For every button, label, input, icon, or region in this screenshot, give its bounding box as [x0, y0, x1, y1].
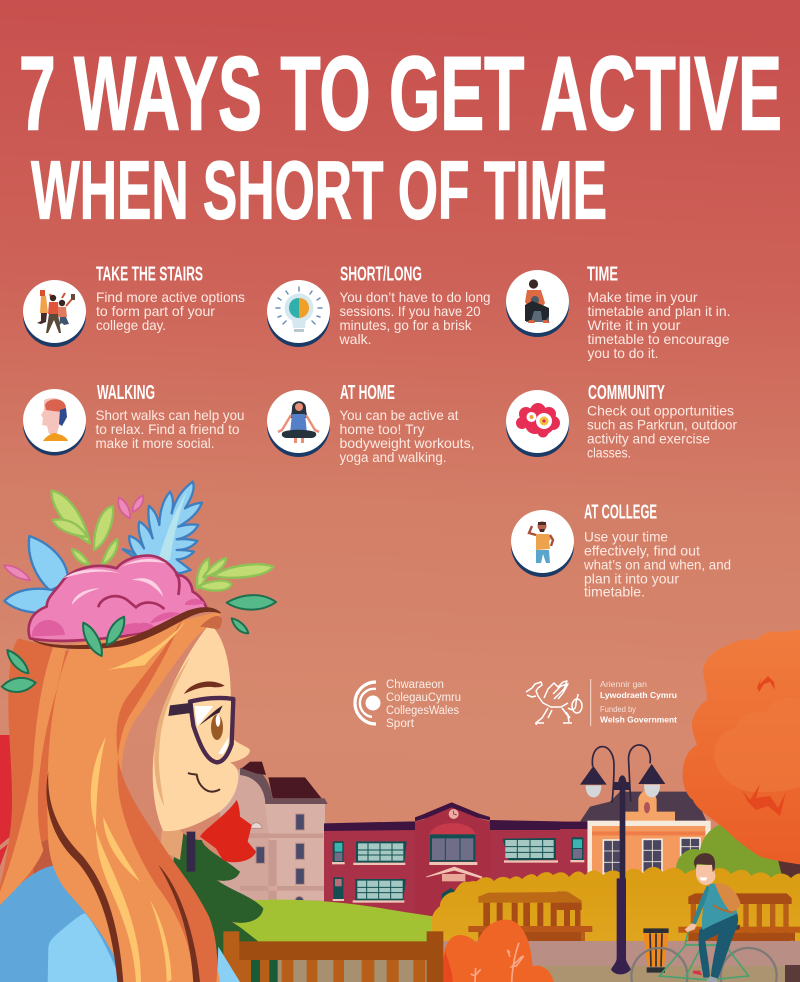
logo: Colleges Wales Sport [355, 679, 461, 730]
heading: AT COLLEGE [584, 500, 657, 524]
body text: make it more social. [96, 436, 214, 451]
funding text: Welsh Government [600, 714, 677, 724]
body text [583, 530, 731, 600]
funding text: Funded by [600, 705, 636, 714]
logo: Colleges Wales Sport: Sport [386, 718, 415, 730]
grass [233, 900, 466, 952]
icon: seated man [506, 270, 569, 337]
red and green foliage behind girl [165, 800, 279, 982]
logo: Colleges Wales Sport: Chwaraeon [386, 679, 444, 691]
legs [699, 911, 738, 979]
body text: timetable and plan it in. [588, 304, 730, 319]
body text: to form part of your [96, 304, 215, 319]
logo: Colleges Wales Sport: CollegesWales [386, 705, 459, 717]
body text: bodyweight workouts, [340, 436, 474, 451]
body text: Write it in your [588, 318, 681, 333]
body text: You can be active at [340, 408, 459, 423]
beige building [210, 762, 328, 903]
blue leaves [4, 536, 68, 613]
body text: effectively, find out [584, 544, 700, 558]
body text: walk. [338, 332, 372, 347]
benches [557, 892, 800, 970]
teal leaves [2, 595, 276, 692]
head [696, 865, 715, 885]
front hair [0, 612, 222, 982]
icon: cloud with cogs [506, 390, 569, 457]
body text: what’s on and when, and [583, 558, 731, 572]
body text [96, 290, 245, 333]
foreground orange bush [442, 920, 554, 982]
body text: Make time in your [588, 290, 698, 305]
body text: sessions. If you have 20 [340, 304, 481, 319]
torso and arm [702, 884, 737, 930]
body text: home too! Try [340, 422, 425, 437]
funding text [600, 680, 677, 724]
brain cut line [31, 607, 221, 649]
foreground bench [223, 931, 443, 982]
body text: Use your time [584, 530, 668, 544]
item: time [506, 262, 730, 361]
heading: TIME [587, 262, 618, 286]
logo: Welsh Government [526, 679, 677, 726]
red tree at left edge [0, 735, 12, 866]
scene: college, park and cyclist [0, 629, 800, 982]
body text [340, 408, 474, 465]
item: short/long [267, 262, 490, 347]
icon: yoga woman [267, 390, 330, 457]
green sprigs [52, 491, 273, 591]
glasses [168, 698, 233, 762]
item: take the stairs [23, 262, 245, 347]
neck [160, 813, 183, 860]
body text: such as Parkrun, outdoor [587, 418, 737, 432]
body text: timetable. [584, 584, 645, 600]
street lamp [580, 745, 665, 974]
pavement and ground [440, 941, 800, 982]
body text: you to do it. [588, 346, 658, 361]
eyebrow [184, 682, 225, 694]
icon: flexing man [511, 510, 574, 577]
neck shadow [33, 837, 87, 887]
icon: head with brain [23, 389, 86, 456]
icon: Welsh dragon [526, 681, 582, 725]
orange building [560, 790, 711, 898]
title [19, 36, 782, 236]
cyclist [631, 853, 777, 982]
back green bush [676, 822, 800, 900]
item: community [506, 381, 737, 460]
heading: SHORT/LONG [340, 262, 422, 286]
icon: light bulb [267, 280, 330, 347]
face [153, 623, 250, 831]
body text: timetable to encourage [588, 332, 730, 347]
divider line [590, 679, 592, 726]
heading: AT HOME [340, 381, 395, 404]
body text: minutes, go for a brisk [340, 318, 472, 333]
body text: college day. [96, 318, 166, 333]
pink leaves [4, 496, 143, 580]
shoulder blue [0, 865, 130, 982]
body text: to relax. Find a friend to [96, 422, 240, 437]
heading: TAKE THE STAIRS [96, 262, 203, 286]
plants [4, 482, 273, 613]
body text: Find more active options [96, 290, 245, 305]
funding text: Lywodraeth Cymru [600, 690, 677, 700]
item: walking [23, 381, 244, 456]
backpack [715, 883, 740, 912]
eye [199, 705, 223, 740]
tree trunk [778, 860, 800, 900]
back hair [0, 638, 110, 982]
icon: jumping friends [23, 280, 86, 347]
logo: Colleges Wales Sport: ColegauCymru [386, 692, 461, 704]
big orange tree [683, 629, 800, 865]
body text: plan it into your [584, 572, 679, 586]
body text: Short walks can help you [96, 408, 244, 423]
item: at home [267, 381, 474, 465]
bicycle [631, 925, 777, 982]
face shadow [154, 657, 190, 807]
heading: COMMUNITY [588, 381, 665, 404]
blue feather plant [123, 482, 202, 573]
smile [189, 773, 219, 792]
item: at college [511, 500, 731, 600]
body text [588, 290, 730, 361]
body text: Check out opportunities [587, 404, 734, 418]
heading: WALKING [97, 381, 155, 404]
red college building [324, 802, 591, 918]
body text: yoga and walking. [340, 450, 446, 465]
body text [587, 404, 737, 460]
hair highlights [107, 622, 185, 670]
body text: activity and exercise [587, 432, 710, 446]
litter bin [643, 928, 669, 973]
body text: You don’t have to do long [340, 290, 490, 305]
illustration: girl with brain garden [0, 482, 276, 982]
brain [29, 556, 207, 641]
yellow hedge [432, 867, 800, 948]
funding text: Ariennir gan [600, 680, 647, 689]
body text [338, 290, 490, 347]
body text: classes. [587, 446, 631, 460]
body text [96, 408, 244, 451]
dark strands [46, 772, 123, 982]
